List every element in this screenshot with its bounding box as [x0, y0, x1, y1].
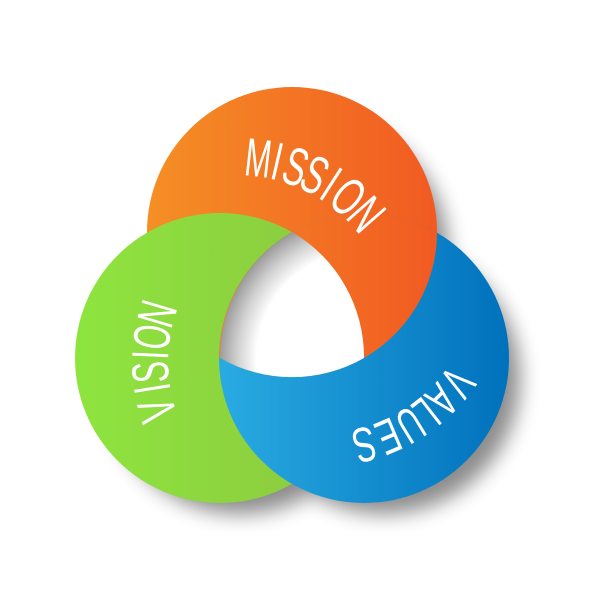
orange overlap on blue: [219, 213, 437, 377]
label: VISION: O: [122, 321, 183, 353]
label: VISION: I: [122, 349, 180, 360]
green circle: [75, 213, 365, 503]
label: VISION: V: [127, 391, 189, 428]
blue circle: [219, 213, 509, 503]
label: VALUES: S: [347, 415, 382, 474]
label: VALUES: [347, 357, 486, 474]
label: VISION: S: [122, 360, 181, 384]
drop shadow: [104, 116, 520, 514]
label: VALUES: U: [386, 396, 434, 454]
label: VALUES: A: [415, 373, 469, 427]
label: VISION: I: [124, 380, 183, 397]
label: VISION: N: [127, 295, 189, 333]
label: MISSION: S: [275, 134, 317, 199]
label: MISSION: N: [335, 185, 397, 244]
orange circle: [147, 87, 437, 377]
label: VALUES: V: [429, 357, 486, 407]
label: MISSION: I: [311, 157, 350, 212]
label: MISSION: [242, 128, 397, 244]
label: MISSION: S: [291, 142, 339, 207]
label: MISSION: I: [266, 132, 288, 192]
center hole with inner shadow: [220, 232, 364, 377]
label: MISSION: O: [319, 165, 378, 229]
label: MISSION: M: [242, 128, 275, 190]
venn diagram: mission, vision, values: [75, 87, 534, 528]
label: VALUES: L: [403, 387, 450, 441]
label: VALUES: E: [368, 407, 409, 466]
label: VISION: [122, 295, 189, 428]
